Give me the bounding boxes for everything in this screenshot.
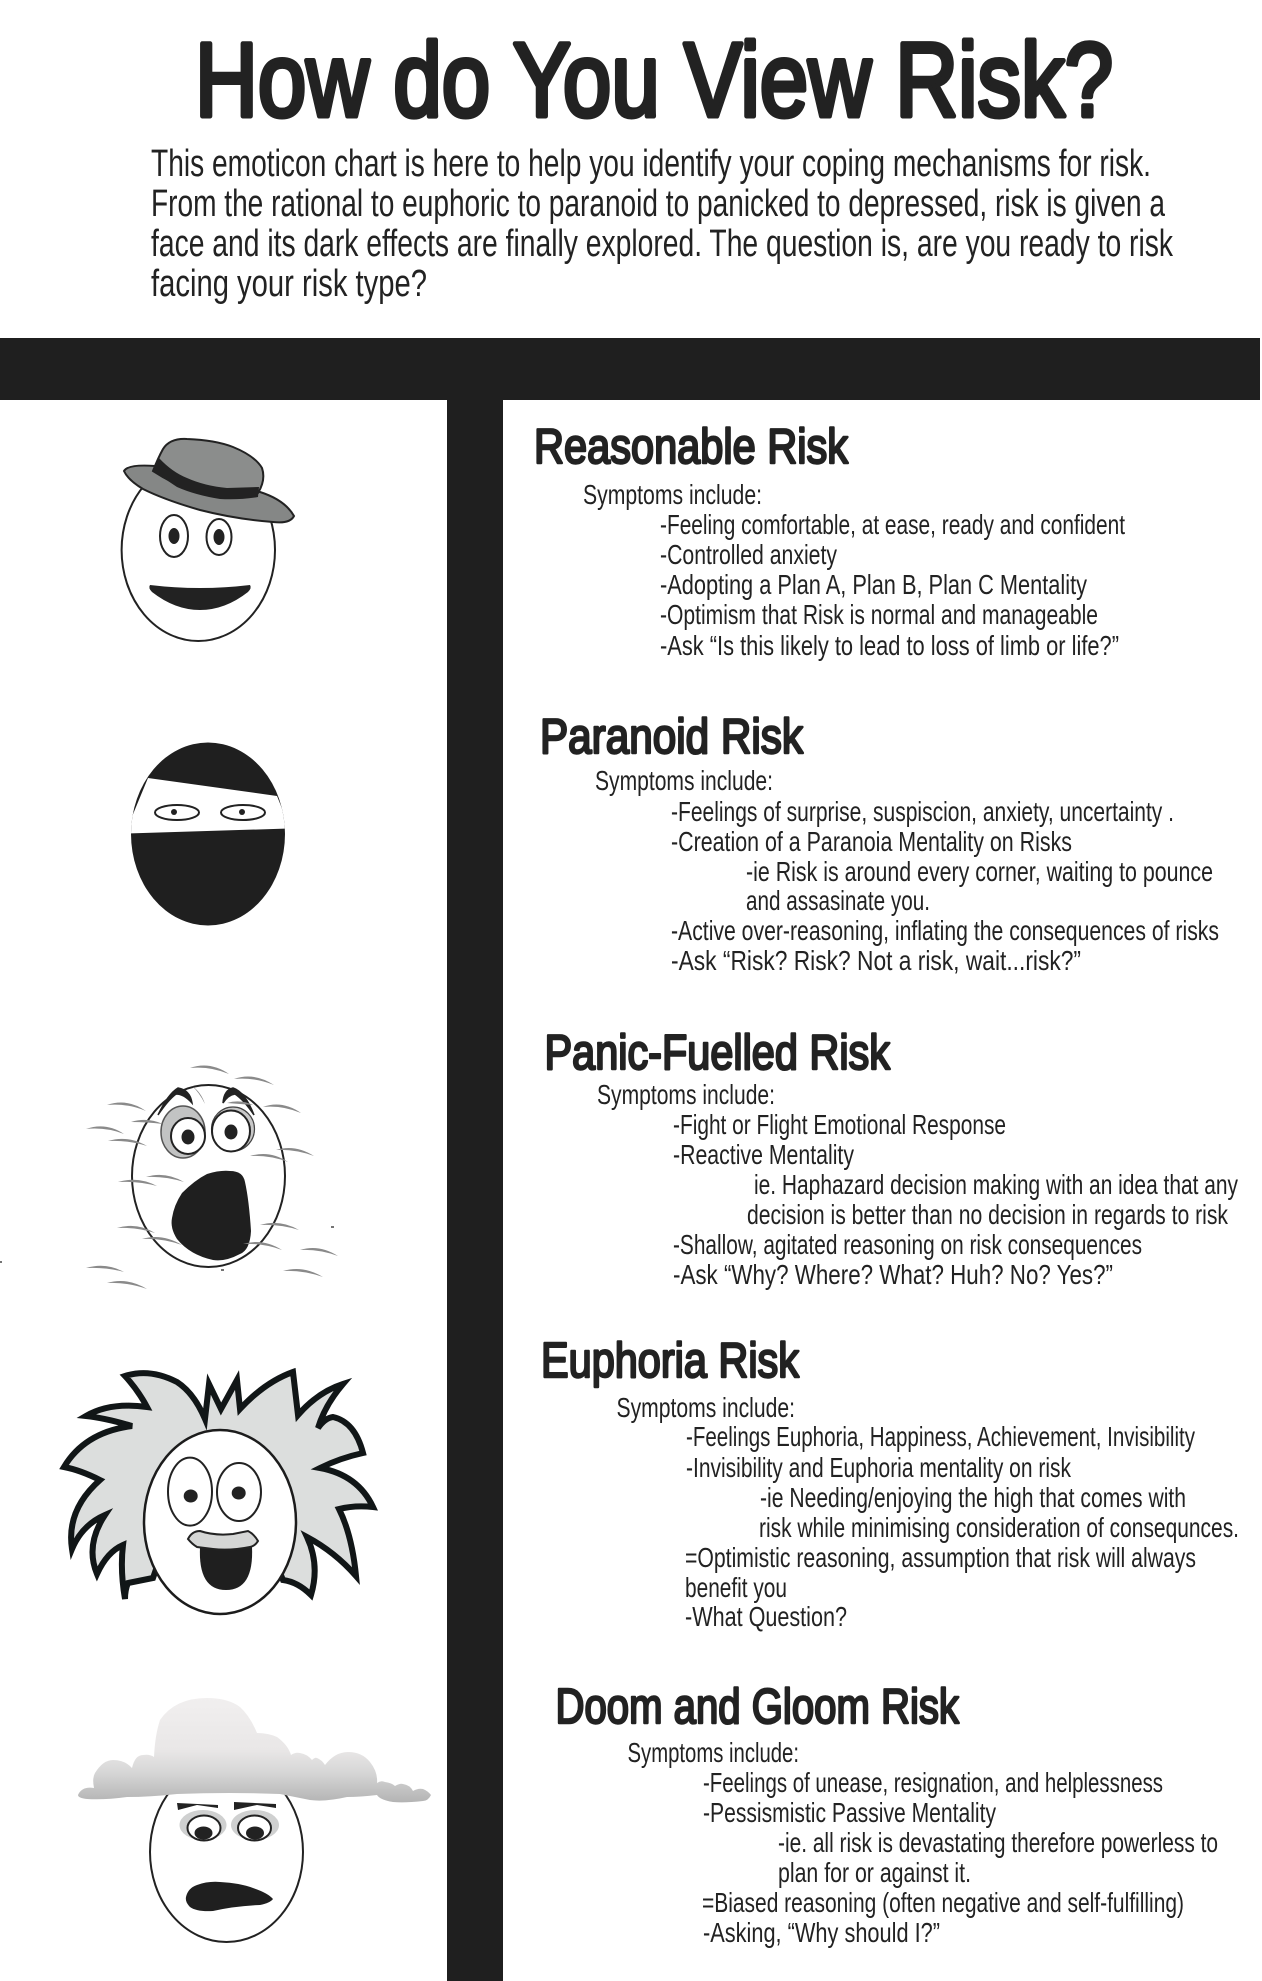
heading: euphoria risk: Euphoria Risk (541, 1334, 799, 1388)
symptoms: panic-fuelled risk (597, 1079, 1238, 1290)
icon: doom and gloom face under cloud (78, 1698, 431, 1942)
symptoms: reasonable risk: Symptoms include: (583, 479, 762, 510)
symptoms: reasonable risk: -Ask “Is this likely to lead to loss of limb or life?” (660, 630, 1119, 661)
symptoms: reasonable risk: -Optimism that Risk is normal and manageable (660, 599, 1098, 630)
symptoms: panic-fuelled risk: -Fight or Flight Emotional Response (673, 1109, 1006, 1140)
panel: doom and gloom risk (556, 1680, 1218, 1948)
symptoms: reasonable risk: -Controlled anxiety (660, 539, 837, 570)
icon: panic face with shaking lines (0, 1066, 338, 1289)
heading: paranoid risk: Paranoid Risk (540, 710, 803, 764)
symptoms: euphoria risk (616, 1392, 1239, 1632)
symptoms: panic-fuelled risk: -Ask “Why? Where? What? Huh? No? Yes?” (673, 1259, 1113, 1290)
symptoms: paranoid risk: -Ask “Risk? Risk? Not a risk, wait...risk?” (671, 945, 1081, 976)
symptoms: euphoria risk: Symptoms include: (616, 1392, 795, 1423)
heading: panic-fuelled risk: Panic-Fuelled Risk (544, 1026, 890, 1080)
symptoms: doom and gloom risk: -Pessismistic Passive Mentality (703, 1797, 996, 1828)
symptoms: reasonable risk: -Feeling comfortable, at ease, ready and confident (660, 509, 1125, 540)
intro text: facing your risk type? (151, 263, 427, 305)
symptoms: doom and gloom risk: plan for or against it. (778, 1857, 971, 1888)
symptoms: paranoid risk: Symptoms include: (595, 765, 773, 796)
symptoms: doom and gloom risk: Symptoms include: (628, 1737, 799, 1768)
symptoms: euphoria risk: -Invisibility and Euphoria mentality on risk (686, 1452, 1071, 1483)
panel: panic-fuelled risk (544, 1026, 1238, 1290)
symptoms: panic-fuelled risk: -Reactive Mentality (673, 1139, 854, 1170)
icon: paranoid ninja face (125, 742, 290, 926)
symptoms: reasonable risk (583, 479, 1125, 661)
symptoms: paranoid risk: and assasinate you. (746, 885, 930, 916)
heading: doom and gloom risk: Doom and Gloom Risk (556, 1680, 959, 1734)
symptoms: paranoid risk (595, 765, 1219, 976)
panel: euphoria risk (541, 1334, 1239, 1632)
symptoms: doom and gloom risk: -Asking, “Why should I?” (703, 1917, 940, 1948)
symptoms: paranoid risk: -Creation of a Paranoia Mentality on Risks (671, 826, 1072, 857)
symptoms: panic-fuelled risk: Symptoms include: (597, 1079, 775, 1110)
panel: reasonable risk (534, 420, 1125, 661)
icon: reasonable face with hat (122, 439, 294, 641)
symptoms: reasonable risk: -Adopting a Plan A, Plan B, Plan C Mentality (660, 569, 1087, 600)
panel: paranoid risk (540, 710, 1219, 976)
heading: reasonable risk: Reasonable Risk (534, 420, 848, 474)
icon: euphoria face with wild hair (64, 1372, 373, 1614)
symptoms: doom and gloom risk (628, 1737, 1218, 1948)
intro text (151, 143, 1174, 305)
symptoms: euphoria risk: -What Question? (685, 1601, 847, 1632)
symptoms: euphoria risk: benefit you (685, 1572, 787, 1603)
